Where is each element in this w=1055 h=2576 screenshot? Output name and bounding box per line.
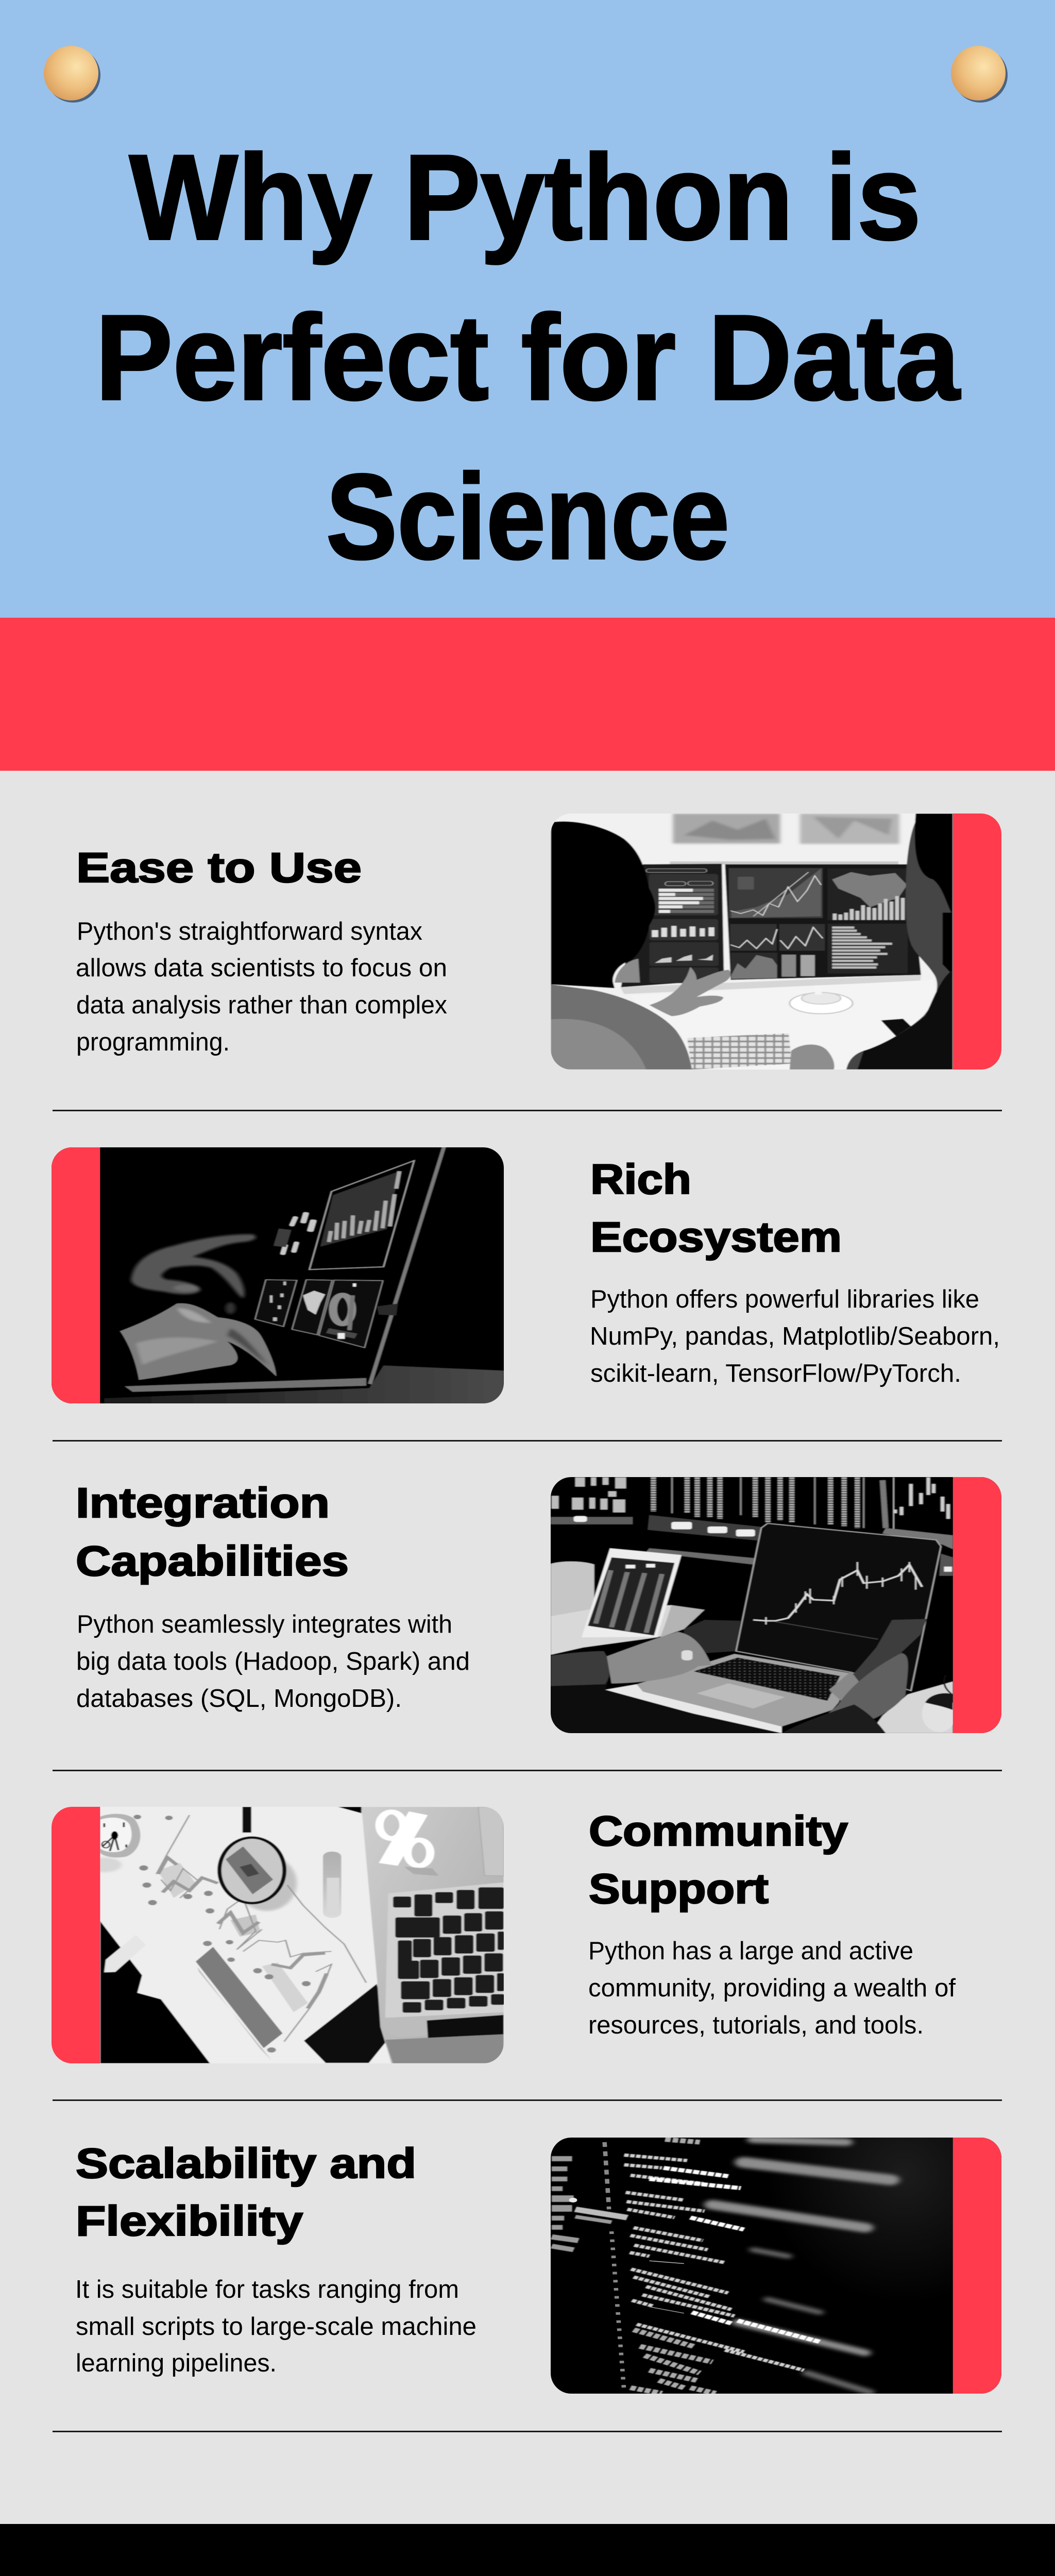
panel: integration capabilities [76, 1475, 1006, 1736]
divider [53, 1770, 1002, 1771]
footer url [73, 2572, 323, 2576]
image card: code on a dark screen [551, 2138, 1001, 2394]
heading: rich ecosystem [590, 1156, 842, 1261]
text block: integration capabilities: big data tools (Hadoop, Spark) and [76, 1648, 470, 1675]
heading: community support [589, 1808, 848, 1912]
heading: rich ecosystem: Ecosystem [590, 1214, 842, 1261]
text block: integration capabilities [76, 1611, 470, 1713]
heading: community support: Community [589, 1808, 848, 1855]
title: Why Python is [129, 129, 921, 265]
heading: ease to use: Ease to Use [76, 844, 362, 891]
divider [53, 2431, 1002, 2432]
heading: scalability and flexibility: Flexibility [76, 2198, 303, 2245]
text block: integration capabilities: databases (SQL, MongoDB). [76, 1685, 402, 1713]
heading: scalability and flexibility [76, 2140, 416, 2245]
panel: community support [47, 1804, 956, 2065]
panel: scalability and flexibility [75, 2136, 1006, 2395]
divider [53, 1440, 1002, 1442]
text block: integration capabilities: Python seamlessly integrates with [77, 1611, 452, 1638]
heading: integration capabilities: Integration [76, 1480, 330, 1527]
text block: ease to use: data analysis rather than complex [76, 991, 447, 1019]
heading: scalability and flexibility: Scalability and [76, 2140, 416, 2187]
title: Perfect for Data [95, 290, 961, 425]
image card: hands and holographic laptop [52, 1147, 504, 1403]
icon: left gold pin [44, 46, 100, 103]
text block: scalability and flexibility [75, 2276, 477, 2377]
heading: integration capabilities [76, 1480, 349, 1585]
title: Science [326, 449, 729, 584]
text block: community support [588, 1937, 956, 2039]
text block: scalability and flexibility: It is suitable for tasks ranging from [75, 2276, 459, 2303]
heading: community support: Support [589, 1866, 769, 1912]
panel: ease to use [76, 811, 1006, 1071]
text block: rich ecosystem: NumPy, pandas, Matplotlib/Seaborn, [590, 1323, 1000, 1350]
divider [53, 1110, 1002, 1111]
text block: ease to use [76, 918, 447, 1056]
text block: community support: Python has a large and active [588, 1937, 913, 1965]
icon: right gold pin [951, 46, 1008, 103]
title [95, 129, 961, 584]
text block: rich ecosystem: scikit-learn, TensorFlow/PyTorch. [590, 1360, 961, 1387]
text block: rich ecosystem: Python offers powerful libraries like [590, 1285, 979, 1313]
image card: charts, magnifier and keyboard [52, 1807, 504, 2063]
image card: two analysts at dashboards [551, 814, 1001, 1070]
text block: scalability and flexibility: learning pipelines. [76, 2349, 277, 2377]
heading: rich ecosystem: Rich [590, 1156, 691, 1203]
text block: ease to use: allows data scientists to focus on [76, 954, 447, 982]
text block: ease to use: programming. [76, 1028, 230, 1056]
text block: community support: resources, tutorials, and tools. [588, 2011, 924, 2039]
text block: ease to use: Python's straightforward syntax [77, 918, 422, 945]
image card: trading charts on laptop [551, 1477, 1001, 1733]
footer bar [0, 2524, 1055, 2576]
text block: rich ecosystem [590, 1285, 1000, 1387]
text block: community support: community, providing a wealth of [588, 1974, 956, 2002]
red banner [0, 618, 1055, 771]
panel: rich ecosystem [47, 1145, 1000, 1405]
text block: scalability and flexibility: small scripts to large-scale machine [76, 2313, 477, 2341]
divider [53, 2099, 1002, 2101]
heading: integration capabilities: Capabilities [76, 1538, 349, 1585]
header panel: blue title area [0, 0, 1055, 618]
